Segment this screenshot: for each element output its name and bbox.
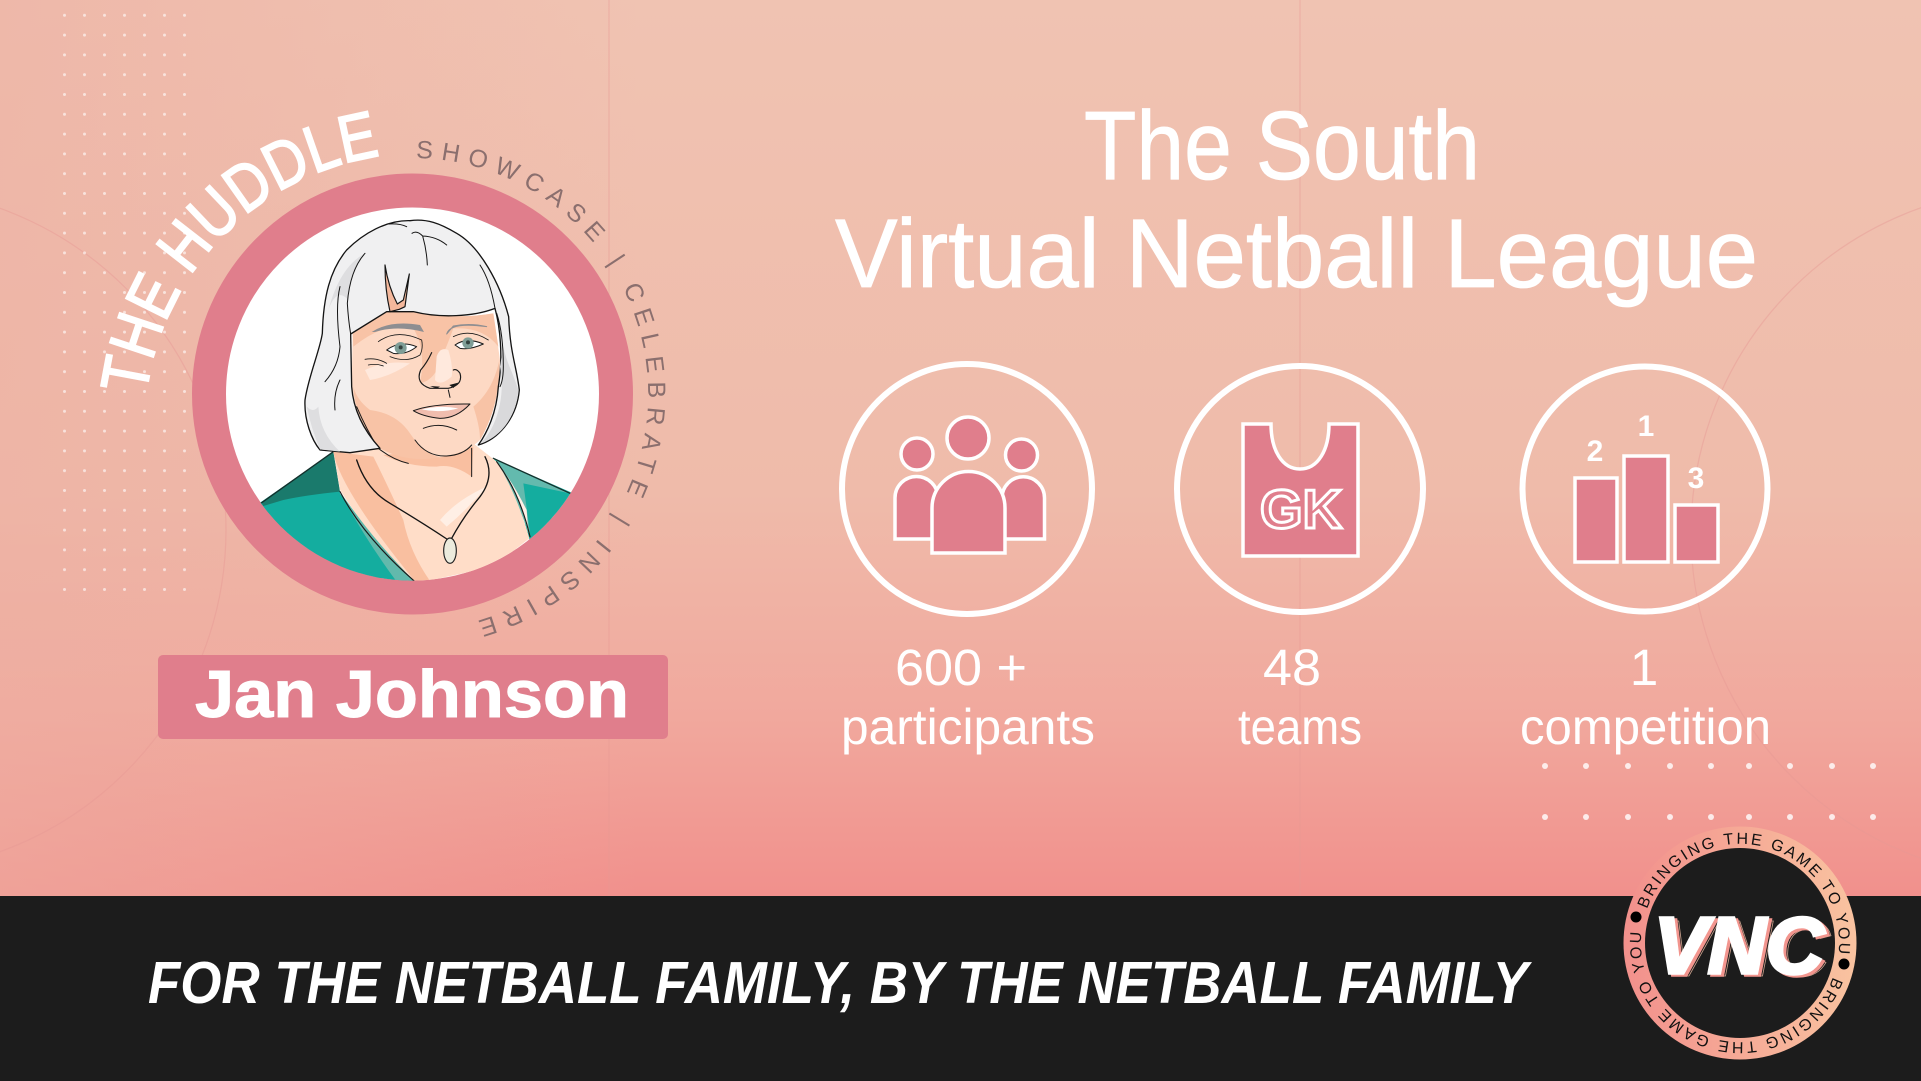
curved tagline: showcase celebrate inspire: SHOWCASE | CELEBRATE | INSPIRE [417,140,666,637]
stat: competition [1520,366,1771,755]
name plate [158,655,668,739]
stat: participants: participants [841,699,1095,755]
logo: VNC badge: BRINGING THE GAME TO YOU [1637,832,1850,954]
stat: competition: competition [1520,699,1771,755]
dot rows: bottom right [1542,763,1876,820]
icon: GK bib: GK [1260,478,1342,540]
icon: podium [1522,366,1768,612]
title: Virtual Netball League [835,199,1758,308]
logo: VNC badge [1624,826,1856,1060]
stat: teams: teams [1238,699,1362,755]
footer slogan: FOR THE NETBALL FAMILY, BY THE NETBALL FAMILY [148,950,1532,1016]
logo: VNC badge: VNC [1654,901,1825,990]
label: 48 [1263,639,1321,696]
stat: teams [1177,366,1423,755]
stat: participants [841,364,1095,755]
label: 600 + [895,639,1027,696]
icon: people [842,364,1092,614]
portrait illustration: Jan Johnson [260,220,571,581]
icon: podium: 1 [1638,410,1654,443]
portrait ring [209,190,616,598]
label: 1 [1630,639,1658,696]
title: The South [1084,91,1480,200]
dot grid: top left [63,13,186,592]
icon: GK bib [1177,366,1423,612]
curved heading: The Huddle: THE HUDDLE [100,110,379,388]
icon: podium: 3 [1688,462,1704,495]
title [835,91,1758,308]
footer band [0,896,1921,1081]
logo: VNC badge: BRINGING THE GAME TO YOU [1630,932,1843,1054]
icon: podium: 2 [1587,435,1603,468]
name: Jan Johnson [195,657,629,732]
logo: VNC badge: VNC [1660,904,1831,993]
logo: VNC badge: VNC [1657,903,1828,992]
